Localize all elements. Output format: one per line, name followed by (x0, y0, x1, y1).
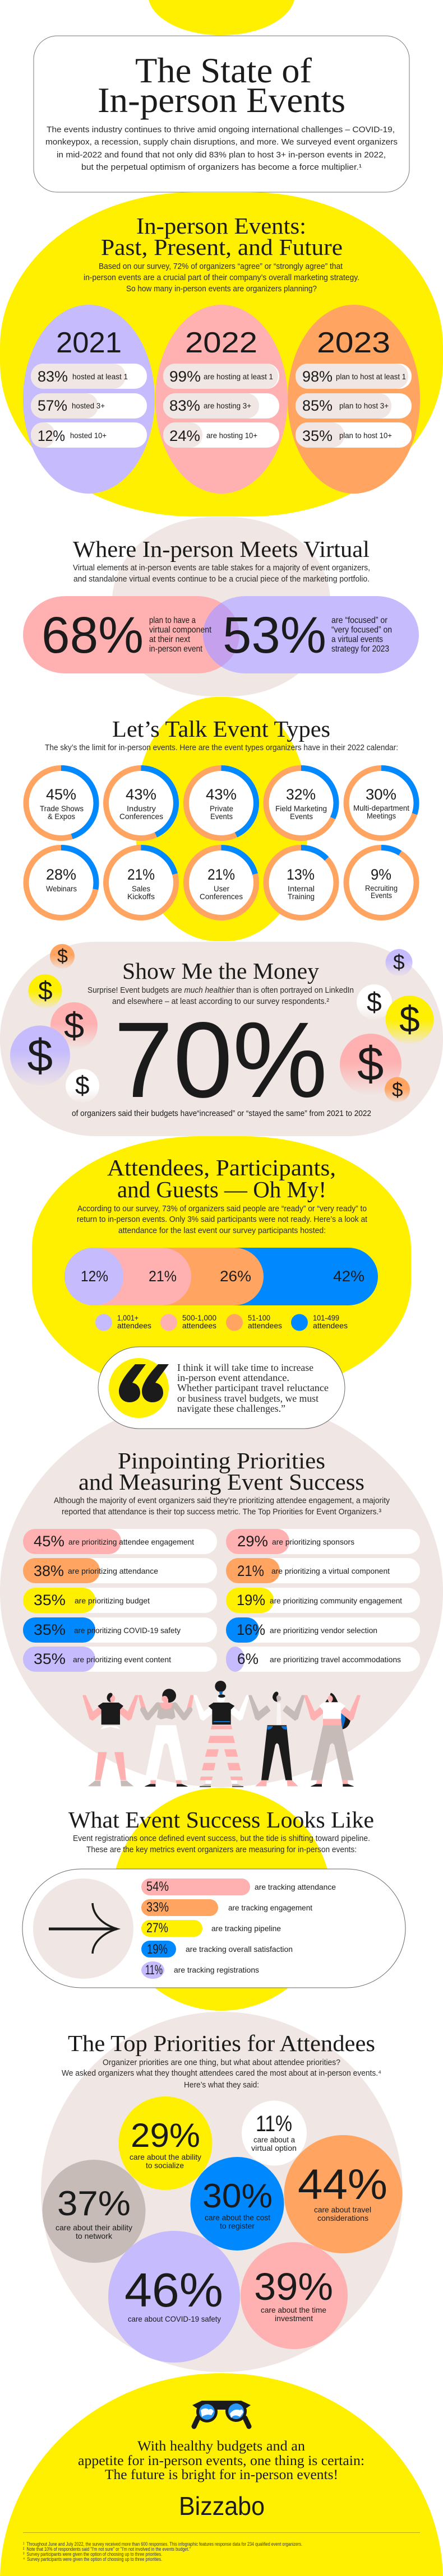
bar chart: metrics (141, 1878, 336, 1979)
person 1 (83, 1693, 138, 1786)
footnotes: ² Note that 10% of respondents said "I'm not sure" or "I'm not involved in the events budget." (23, 2546, 191, 2552)
ring: internal training: Training (288, 892, 315, 901)
stat: 53%: strategy for 2023 (331, 644, 389, 654)
legend: 500-1,000 (182, 1313, 216, 1322)
quote text: Whether participant travel reluctance (177, 1382, 329, 1393)
ring: internal training: 13% (287, 866, 315, 883)
bar chart: metrics: 33% (146, 1900, 169, 1915)
ring: trade shows: & Expos (48, 812, 75, 821)
panel: top priorities for attendees (41, 2012, 403, 2372)
heading: and Measuring Event Success (79, 1469, 364, 1495)
bubble: 29%: 29% (131, 2117, 200, 2154)
ring: private events: Private (210, 804, 233, 813)
icons: left coins: $ (38, 976, 53, 1005)
legend: attendees (117, 1321, 151, 1330)
stacked bar chart (64, 1248, 378, 1305)
stacked bar chart: 42% (333, 1268, 364, 1285)
ring: multi-department: Meetings (367, 811, 396, 820)
body text: return to in-person events. Only 3% said participants were not ready. Here’s a look at (77, 1215, 367, 1224)
column: 2023 (288, 305, 420, 494)
bubble: 11% (242, 2101, 307, 2166)
bubble: 30%: care about the cost (205, 2213, 270, 2222)
intro text (45, 125, 398, 172)
icons: right coins: $ (357, 1038, 384, 1091)
ring: field marketing: 32% (286, 786, 316, 803)
intro text: monkeypox, a recession, supply chain disruptions, and more. We surveyed event organizers (45, 138, 398, 147)
column: 2023: plan to host 3+ (339, 401, 389, 410)
column: 2022: 2022 (185, 327, 257, 359)
body text (54, 1496, 390, 1517)
icons: left coins: $ (27, 1030, 53, 1081)
stat: 68%: plan to have a (149, 616, 196, 625)
bubble: 37%: 37% (57, 2184, 131, 2223)
bars: right column: are prioritizing vendor selection (270, 1626, 377, 1635)
column: 2022: are hosting 3+ (204, 401, 251, 410)
icons: right coins (340, 949, 434, 1103)
ring: multi-department (347, 768, 416, 838)
bar chart: metrics: 27% (146, 1921, 168, 1936)
ring: user conferences: Conferences (200, 892, 243, 901)
icons: right coins: $ (367, 988, 382, 1017)
stat: 53%: 53% (223, 607, 326, 664)
bar chart: metrics: 54% (146, 1879, 169, 1894)
body text: We asked organizers what they thought attendees cared the most about at in-person events.⁴ (62, 2069, 381, 2078)
heading (79, 1448, 364, 1495)
body text: According to our survey, 73% of organizers said people are “ready” or “very ready” to (77, 1205, 367, 1213)
ring: field marketing (266, 768, 336, 838)
heading (101, 213, 343, 260)
ring: multi-department: Multi-department (353, 803, 409, 812)
ring: trade shows: 45% (46, 786, 76, 803)
bubble: 46%: 46% (124, 2264, 223, 2317)
icon: quote mark (109, 1358, 169, 1418)
ring: sales kickoffs: Sales (132, 884, 150, 893)
bars: right column: are prioritizing a virtual component (271, 1566, 390, 1575)
ring: webinars: 28% (46, 866, 76, 883)
closing text: The future is bright for in-person events! (105, 2467, 338, 2482)
panel: past present future (0, 192, 443, 517)
footnotes: ⁴ Survey participants were given the option of choosing up to three priorities. (23, 2556, 162, 2563)
bars: right column: are prioritizing travel accommodations (270, 1655, 401, 1664)
icons: left coins: $ (64, 1005, 84, 1046)
body text: So how many in-person events are organizers planning? (126, 285, 317, 294)
icons: left coins: $ (57, 946, 68, 967)
bars: right column: are prioritizing community engagement (270, 1596, 402, 1605)
body text: in-person events are a crucial part of their company’s overall marketing strategy. (84, 273, 359, 282)
column: 2023: 35% (302, 427, 333, 444)
quote text: I think it will take time to increase (177, 1362, 313, 1373)
heading: Where In-person Meets Virtual (73, 536, 370, 562)
bars: left column: 35% (34, 1650, 66, 1667)
bars: left column: 45% (34, 1533, 64, 1550)
stat: 53%: are “focused” or (331, 616, 388, 625)
bars: right column: 16% (237, 1621, 265, 1638)
footnotes: ³ Survey participants were given the option of choosing up to three priorities. (23, 2551, 162, 2558)
bars: left column: are prioritizing budget (75, 1596, 150, 1605)
stacked bar chart: 12% (81, 1268, 108, 1285)
bars: right column: 29% (237, 1533, 268, 1550)
heading: Attendees, Participants, (107, 1155, 336, 1180)
bubble: 11%: care about a (253, 2135, 295, 2144)
bar chart: metrics: are tracking attendance (255, 1882, 336, 1891)
column: 2021: hosted at least 1 (72, 372, 128, 381)
column: 2021: hosted 3+ (72, 401, 105, 410)
quote text: or business travel budgets, we must (177, 1393, 319, 1404)
closing text: With healthy budgets and an (137, 2439, 306, 2454)
person 4 (249, 1691, 304, 1786)
bubble: 39% (241, 2242, 348, 2349)
body text: Based on our survey, 72% of organizers “agree” or “strongly agree” that (99, 262, 343, 271)
body text: event success: Event registrations once defined event success, but the tide is shifting toward pipeline. (73, 1834, 370, 1843)
stat: 68%: at their next (149, 635, 190, 644)
top yellow shape (148, 0, 295, 35)
body text: Here’s what they said: (184, 2081, 259, 2090)
bubble: 44%: considerations (317, 2214, 368, 2222)
body text: and elsewhere – at least according to our survey respondents.² (112, 997, 329, 1006)
body text (62, 2058, 381, 2090)
bubble: 44%: 44% (298, 2161, 387, 2208)
body text (77, 1205, 367, 1235)
column: 2022: are hosting at least 1 (204, 372, 273, 381)
column: 2021: 83% (38, 368, 68, 385)
title: The State of (135, 50, 312, 90)
panel: where in-person meets virtual (23, 517, 419, 696)
bar chart: metrics: are tracking pipeline (211, 1924, 281, 1933)
footnotes (23, 2541, 302, 2563)
heading: event success: What Event Success Looks Like (68, 1807, 374, 1833)
stat: 68% (41, 607, 211, 664)
quote text: in-person event attendance. (177, 1372, 289, 1383)
ring: industry conferences: 43% (126, 786, 156, 803)
ring: multi-department: 30% (366, 786, 396, 803)
bars: right column: 19% (237, 1592, 265, 1608)
column: 2022: are hosting 10+ (206, 431, 257, 440)
ring: sales kickoffs: 21% (127, 866, 155, 883)
ring: private events: Events (210, 812, 233, 821)
stat: 68%: in-person event (149, 644, 202, 654)
ring: user conferences (186, 848, 256, 918)
ring: industry conferences: Industry (127, 804, 156, 813)
stacked bar chart: 26% (220, 1268, 251, 1285)
stat: 53%: a virtual events (331, 635, 383, 644)
bars: right column (226, 1529, 420, 1672)
column: 2021: 57% (38, 397, 67, 414)
bar chart: metrics: are tracking overall satisfaction (186, 1945, 293, 1954)
closing text: appetite for in-person events, one thing is certain: (78, 2453, 364, 2468)
bar chart: metrics: are tracking engagement (228, 1903, 312, 1912)
bars: left column: are prioritizing event content (73, 1655, 171, 1664)
icons: left coins (10, 944, 99, 1103)
ring: user conferences: 21% (207, 866, 235, 883)
ring: private events: 43% (206, 786, 237, 803)
ring: field marketing: Field Marketing (275, 804, 327, 813)
caption: of organizers said their budgets have“increased” or “stayed the same” from 2021 to 2022 (72, 1109, 371, 1118)
icons: right coins: $ (392, 1079, 403, 1101)
bars: left column: are prioritizing attendee engagement (68, 1537, 194, 1546)
ring: internal training (266, 848, 336, 918)
stat: 53% (223, 607, 392, 664)
ring: private events (186, 768, 256, 838)
ring: recruiting events: Recruiting (365, 884, 398, 892)
intro text: but the perpetual optimism of organizers has become a force multiplier.¹ (81, 163, 362, 172)
bars: right column: are prioritizing sponsors (272, 1537, 354, 1546)
icon: merging arrow (33, 1878, 133, 1979)
big stat: 70% (114, 999, 327, 1120)
ring: webinars (26, 848, 96, 918)
stat: 53%: “very focused” on (331, 625, 392, 635)
body text: event success: These are the key metrics event organizers are measuring for in-person events: (86, 1845, 357, 1854)
body text: The sky’s the limit for in-person events. Here are the event types organizers have in their 2022 calendar: (45, 743, 398, 752)
body text: Virtual elements at in-person events are table stakes for a majority of event organizers, (73, 564, 370, 573)
bars: left column: are prioritizing attendance (68, 1566, 158, 1575)
bubble: 46%: care about COVID-19 safety (128, 2314, 221, 2323)
column: 2022: 99% (169, 368, 201, 385)
title: In-person Events (98, 80, 345, 120)
bubble: 30%: to register (220, 2221, 255, 2230)
heading: The Top Priorities for Attendees (68, 2030, 375, 2056)
person 5 (304, 1693, 360, 1787)
ring: trade shows (26, 768, 96, 838)
body text: Although the majority of event organizers said they’re prioritizing attendee engagement, a majority (54, 1496, 390, 1505)
panel: pinpointing priorities (23, 1448, 420, 1787)
body text (87, 986, 354, 1006)
bars: right column: 21% (237, 1563, 264, 1579)
bars: left column: 38% (34, 1563, 64, 1579)
ring: webinars: Webinars (46, 884, 77, 893)
legend: attendees (248, 1321, 282, 1330)
panel: priorities background (0, 1396, 443, 1787)
body text: Surprise! Event budgets are much healthier than is often portrayed on LinkedIn (87, 986, 354, 995)
bubble: 46% (108, 2231, 240, 2363)
bubble: 29%: to socialize (146, 2161, 184, 2170)
panel: closing (0, 2373, 443, 2576)
footnotes: ¹ Throughout June and July 2022, the survey received more than 600 responses. This infographic features response data for 234 qualified event organizers. (23, 2541, 302, 2547)
icons: right coins: $ (399, 998, 420, 1040)
panel: title box (34, 36, 409, 192)
body text: event success (73, 1834, 370, 1854)
panel: event types (26, 697, 416, 941)
legend: 1,001+ (117, 1313, 139, 1322)
body text (84, 262, 359, 294)
heading: and Guests — Oh My! (117, 1177, 326, 1202)
bubble: 29%: care about the ability (130, 2152, 201, 2161)
column: 2021: 2021 (56, 327, 122, 359)
title (98, 50, 345, 120)
bars: left column: are prioritizing COVID-19 safety (74, 1626, 181, 1635)
bar chart: metrics: 19% (147, 1942, 168, 1957)
quote text: navigate these challenges.” (177, 1403, 285, 1414)
body text (73, 564, 370, 584)
bubble: 30% (191, 2157, 284, 2250)
ring: sales kickoffs: Kickoffs (127, 892, 155, 901)
column: 2023: plan to host 10+ (339, 431, 392, 440)
body text: attendance for the last event our survey participants hosted: (118, 1226, 326, 1235)
bubble: 39%: investment (275, 2314, 313, 2323)
bars: left column: 35% (34, 1592, 66, 1608)
bubble: 30%: 30% (202, 2177, 273, 2215)
stat: 68%: virtual component (149, 625, 211, 635)
quote text (177, 1362, 329, 1414)
column: 2023: 85% (302, 397, 333, 414)
ring: internal training: Internal (288, 884, 315, 893)
closing text (78, 2439, 364, 2482)
legend: attendees (182, 1321, 216, 1330)
ring: industry conferences (106, 768, 176, 838)
column: 2023: plan to host at least 1 (336, 372, 406, 381)
ring: user conferences: User (214, 884, 229, 893)
bubble: 11%: 11% (256, 2112, 292, 2136)
column: 2021 (23, 305, 155, 494)
legend: 101-499 (313, 1313, 339, 1322)
icon: sunglasses (192, 2401, 251, 2426)
person 2 (139, 1689, 193, 1787)
body text: reported that attendance is their top success metric. The Top Priorities for Event Organizers.³ (62, 1508, 381, 1517)
heading: Pinpointing Priorities (118, 1448, 325, 1473)
legend: 51-100 (248, 1313, 270, 1322)
icons: right coins: $ (393, 951, 405, 974)
bubble: 37%: care about their ability (56, 2223, 132, 2232)
ring: trade shows: Trade Shows (40, 804, 84, 813)
heading: In-person Events: (136, 213, 306, 239)
legend (95, 1313, 348, 1331)
stacked bar chart: 21% (149, 1268, 177, 1285)
column: 2021: hosted 10+ (70, 431, 107, 440)
body text: and standalone virtual events continue to be a crucial piece of the marketing portfolio. (73, 575, 370, 584)
intro text: The events industry continues to thrive amid ongoing international challenges – COVID-19, (47, 125, 395, 134)
ring: industry conferences: Conferences (119, 812, 163, 821)
ring: recruiting events: Events (371, 891, 392, 900)
ring: sales kickoffs (106, 848, 176, 918)
heading: Past, Present, and Future (101, 234, 343, 260)
panel: show me the money (0, 942, 443, 1136)
bubble: 39%: care about the time (261, 2305, 326, 2314)
ring: recruiting events: 9% (371, 866, 391, 883)
bubble: 37% (43, 2160, 146, 2263)
column: 2021: 12% (38, 427, 65, 444)
column: 2022 (155, 305, 288, 494)
legend: attendees (313, 1321, 348, 1330)
bars: left column: 35% (34, 1621, 66, 1638)
bubble: 44% (284, 2135, 403, 2253)
bar chart: metrics: 11% (145, 1963, 163, 1978)
illustration: five people holding hands (83, 1681, 360, 1787)
body text: Organizer priorities are one thing, but what about attendee priorities? (103, 2058, 340, 2067)
panel: what event success looks like background (112, 1788, 331, 2011)
ring: field marketing: Events (290, 812, 313, 821)
ring: recruiting events (347, 848, 416, 918)
column: 2022: 24% (169, 427, 200, 444)
bar chart: metrics: are tracking registrations (174, 1965, 259, 1974)
bars: left column (23, 1529, 217, 1672)
bubble: 44%: care about travel (314, 2205, 371, 2214)
column: 2023: 98% (302, 368, 333, 385)
bars: right column: 6% (237, 1650, 259, 1667)
icons: left coins: $ (75, 1071, 90, 1100)
logo: Bizzabo (179, 2491, 265, 2521)
callout: quote (98, 1347, 345, 1429)
heading: Let’s Talk Event Types (112, 716, 330, 742)
pill shapes (23, 596, 419, 673)
bubble: 11%: virtual option (251, 2143, 297, 2152)
column: 2022: 83% (169, 397, 200, 414)
bubble: 37%: to network (76, 2231, 113, 2240)
stat: 68%: 68% (41, 607, 144, 664)
heading: Show Me the Money (122, 958, 320, 984)
bubble: 29% (119, 2096, 212, 2190)
bubble: 39%: 39% (254, 2265, 333, 2308)
panel: metrics box (22, 1869, 405, 1988)
person 3 (194, 1681, 249, 1787)
heading (107, 1155, 336, 1202)
intro text: in mid-2022 and found that not only did 83% plan to host 3+ in-person events in 2022, (57, 151, 386, 160)
column: 2023: 2023 (317, 327, 390, 359)
panel: attendees (32, 1136, 411, 1395)
